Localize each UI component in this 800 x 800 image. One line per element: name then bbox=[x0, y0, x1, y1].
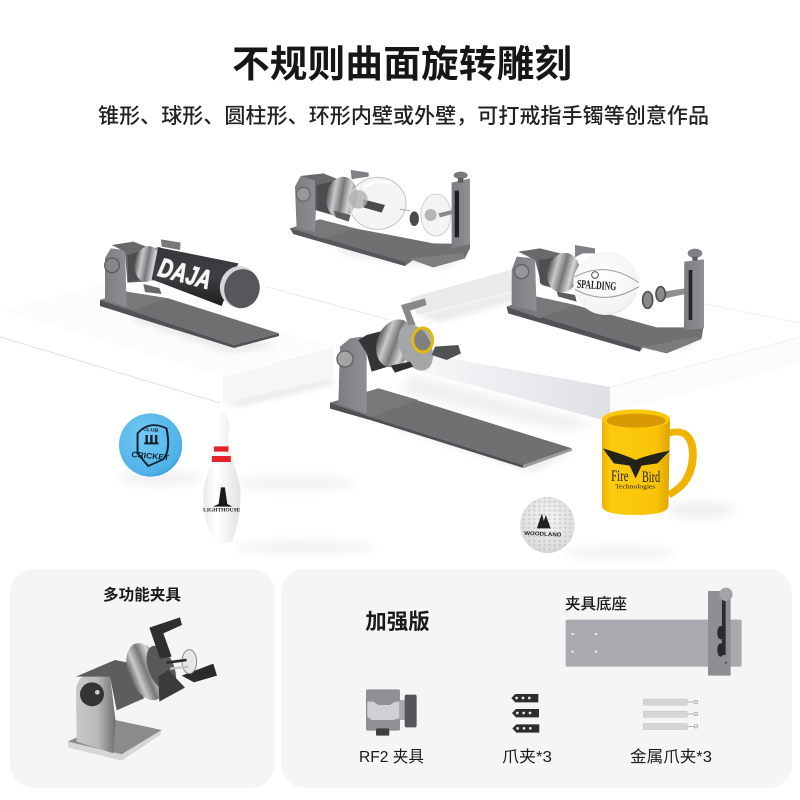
top clamp tab bbox=[161, 239, 181, 250]
hub bbox=[391, 318, 440, 376]
right post bbox=[452, 178, 470, 248]
base plate bbox=[68, 720, 162, 754]
end cap bbox=[220, 265, 264, 312]
chrome flange bbox=[119, 637, 173, 706]
left platform top shade bbox=[0, 285, 330, 377]
machine: black cylinder bbox=[100, 239, 279, 353]
top jaw bbox=[401, 298, 427, 325]
gearbox bbox=[358, 329, 393, 372]
ring bbox=[182, 650, 197, 674]
lighthouse emblem bbox=[213, 487, 232, 507]
panel: enhanced version bbox=[281, 569, 792, 788]
lower tab bbox=[557, 292, 577, 302]
base plate bbox=[100, 292, 279, 345]
lower tab bbox=[334, 211, 351, 222]
DAJA logo: DAJA bbox=[155, 252, 215, 295]
lighthouse text: LIGHTHOUSE bbox=[203, 507, 240, 513]
claw clamps illustration bbox=[511, 694, 539, 733]
soft shadow under left platform bbox=[223, 377, 333, 406]
fixture illustration bbox=[68, 617, 217, 761]
arm bbox=[438, 208, 462, 217]
tree emblem bbox=[537, 513, 551, 528]
black cylinder body bbox=[152, 247, 238, 306]
object: yellow mug bbox=[602, 409, 693, 515]
upright bbox=[512, 257, 537, 312]
top jaw bbox=[149, 617, 182, 658]
enhanced heading: 加强版 bbox=[365, 610, 430, 634]
left platform right face bbox=[223, 347, 333, 403]
right jaw bbox=[432, 345, 461, 360]
screw discs bbox=[643, 292, 653, 308]
bulb stem bbox=[400, 209, 410, 211]
upright bbox=[76, 672, 116, 753]
hex bolt bbox=[80, 682, 104, 706]
inner jaw bbox=[363, 199, 385, 213]
ring fixture head bbox=[337, 298, 461, 414]
bolt bbox=[337, 351, 353, 367]
hub in bulb bbox=[349, 190, 368, 209]
gearbox bbox=[301, 173, 347, 217]
shield emblem bbox=[138, 425, 168, 466]
RF2 fixture illustration bbox=[366, 689, 417, 736]
metal claw rods illustration bbox=[643, 699, 698, 730]
base plate bbox=[290, 219, 470, 267]
fire text: Fire bbox=[611, 467, 629, 485]
upright bbox=[105, 248, 127, 307]
woodland text: WOODLAND bbox=[524, 531, 561, 538]
chrome chuck bbox=[323, 174, 360, 220]
small bulb bbox=[421, 194, 451, 236]
RF2 label: RF2 夹具 bbox=[359, 748, 424, 766]
lower jaw bbox=[158, 670, 185, 702]
cricket text: CRICKET bbox=[131, 450, 170, 462]
upright bbox=[338, 337, 367, 414]
top tab bbox=[575, 245, 595, 257]
lower clamp bbox=[143, 284, 162, 294]
object: bowling pin bbox=[203, 413, 240, 543]
screw discs bbox=[410, 211, 419, 226]
arm bbox=[663, 287, 697, 298]
bolt bbox=[515, 265, 529, 279]
upright bbox=[295, 176, 317, 232]
stepped white display platforms bbox=[0, 270, 800, 430]
left platform bottom edge bbox=[0, 337, 220, 403]
basketball bbox=[573, 252, 639, 315]
end cap rim bbox=[216, 262, 262, 311]
gearbox bbox=[112, 242, 155, 283]
top knob bbox=[454, 172, 468, 179]
chrome chuck bbox=[543, 249, 584, 296]
top tab bbox=[351, 170, 369, 179]
glass bulb bbox=[349, 177, 406, 229]
object: golf ball bbox=[520, 497, 575, 553]
handle bbox=[668, 432, 693, 495]
gearbox bbox=[518, 248, 567, 290]
red stripes bbox=[212, 446, 231, 462]
fixture base illustration bbox=[566, 588, 742, 676]
panel: multifunction fixture bbox=[10, 569, 275, 788]
yellow ring bbox=[413, 328, 433, 352]
floor shadows of objects bbox=[118, 472, 734, 558]
panel heading: 多功能夹具 bbox=[103, 585, 181, 604]
rear platform face bbox=[410, 270, 513, 315]
soft shadow under right platform bbox=[400, 375, 600, 430]
base plate bbox=[507, 297, 703, 353]
chrome chuck bbox=[370, 314, 420, 373]
right jaw bbox=[182, 664, 217, 682]
hub bbox=[141, 641, 182, 695]
gearbox bbox=[76, 660, 144, 710]
top knob bbox=[688, 249, 702, 258]
object: blue cricket ball bbox=[119, 413, 182, 477]
machine: glass bulb bbox=[290, 170, 470, 270]
bolt bbox=[296, 187, 310, 201]
rim bbox=[602, 409, 670, 429]
base plate bbox=[330, 388, 572, 473]
lower jaw bbox=[391, 362, 413, 373]
technologies text: Technologies bbox=[615, 482, 656, 490]
right post bbox=[684, 259, 704, 330]
club text: CLUB bbox=[143, 427, 159, 434]
mug body bbox=[602, 419, 670, 515]
SPALDING logo: SPALDING bbox=[577, 277, 617, 293]
base label: 夹具底座 bbox=[565, 595, 627, 613]
machine: ring bbox=[330, 298, 572, 473]
hex bolt bbox=[105, 258, 119, 273]
title: 不规则曲面旋转雕刻 bbox=[232, 43, 572, 85]
chrome collar bbox=[140, 247, 161, 281]
claw clamps label: 爪夹*3 bbox=[502, 748, 552, 766]
wing emblem bbox=[603, 448, 670, 478]
machine: basketball bbox=[507, 245, 704, 353]
metal claw label: 金属爪夹*3 bbox=[630, 748, 712, 766]
right platform left face bbox=[415, 353, 610, 420]
rear edge line bbox=[267, 287, 390, 320]
bird text: Bird bbox=[642, 468, 660, 486]
rear platform shadow bbox=[417, 290, 520, 322]
subtitle: 锥形、球形、圆柱形、环形内壁或外壁，可打戒指手镯等创意作品 bbox=[98, 105, 709, 128]
right platform right face bbox=[610, 337, 800, 413]
